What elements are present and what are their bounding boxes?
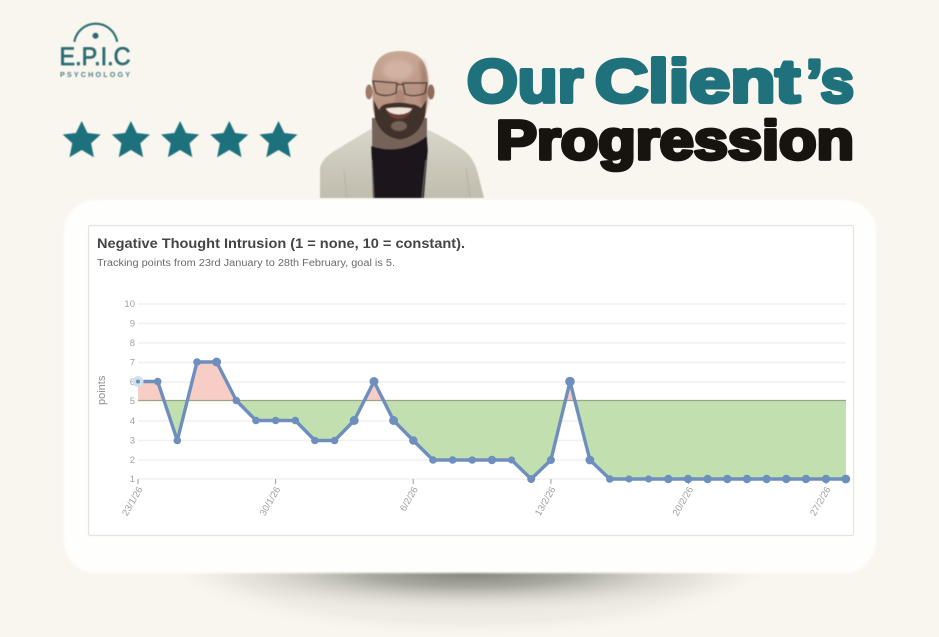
chart heading: Negative Thought Intrusion (1 = none, 10 = constant). <box>97 236 465 251</box>
y-axis title: points <box>96 375 108 405</box>
cardigan <box>320 129 484 198</box>
logo: E.P.I.C Psychology: PSYCHOLOGY <box>60 70 130 79</box>
y-axis labels <box>124 299 135 485</box>
x-axis date labels: 30/1/26 <box>258 485 283 518</box>
nose <box>394 90 406 102</box>
card drop shadow <box>170 507 770 637</box>
title line 1 <box>467 48 854 115</box>
y-axis labels: 2 <box>130 455 135 466</box>
green area: below goal <box>164 400 846 479</box>
black t-shirt <box>371 136 428 198</box>
y-axis labels: 10 <box>124 299 135 310</box>
y-axis labels: 7 <box>130 358 135 368</box>
x-axis date labels: 20/2/26 <box>671 485 696 518</box>
title line 1: ’s <box>806 48 854 115</box>
x-axis date labels <box>120 485 834 518</box>
x-axis date labels: 6/2/26 <box>398 485 421 513</box>
y-axis labels: 4 <box>130 416 135 427</box>
y-axis labels: 8 <box>130 338 135 349</box>
forehead highlight <box>383 60 413 80</box>
title line 1: Our <box>467 48 583 115</box>
beard <box>374 100 426 140</box>
title line 1: Client <box>595 48 800 115</box>
five star rating <box>63 121 298 157</box>
chin patch <box>391 121 407 131</box>
x-axis date labels: 23/1/26 <box>120 485 146 518</box>
data line <box>138 362 846 479</box>
head <box>372 51 428 137</box>
red area: above goal <box>138 362 575 400</box>
y-axis labels: 1 <box>130 474 135 485</box>
gridlines <box>138 304 846 479</box>
y-axis labels: 9 <box>130 318 135 330</box>
x-axis date labels: 13/2/26 <box>533 485 558 518</box>
white card <box>64 200 876 573</box>
cardigan folds <box>344 160 470 198</box>
goal line at 5 <box>138 400 846 402</box>
title line 2: Progression <box>496 109 854 171</box>
ears <box>366 84 372 100</box>
y-axis labels: 3 <box>130 436 135 446</box>
x-axis ticks <box>138 479 826 484</box>
x-axis date labels: 27/2/26 <box>808 485 834 518</box>
glasses <box>373 81 427 96</box>
logo: E.P.I.C Psychology: E.P.I.C <box>60 43 130 71</box>
title <box>467 48 854 171</box>
teeth <box>386 108 412 114</box>
chart panel <box>88 226 854 536</box>
side shading <box>420 60 427 105</box>
portrait illustration <box>320 51 484 198</box>
y-axis labels: 5 <box>130 396 135 407</box>
mouth <box>385 107 413 119</box>
y-axis labels: 6 <box>130 377 135 388</box>
chart subheading: Tracking points from 23rd January to 28th February, goal is 5. <box>97 258 395 269</box>
neck with tattoos <box>372 118 427 151</box>
logo: E.P.I.C Psychology <box>60 24 130 79</box>
data points <box>132 358 850 483</box>
